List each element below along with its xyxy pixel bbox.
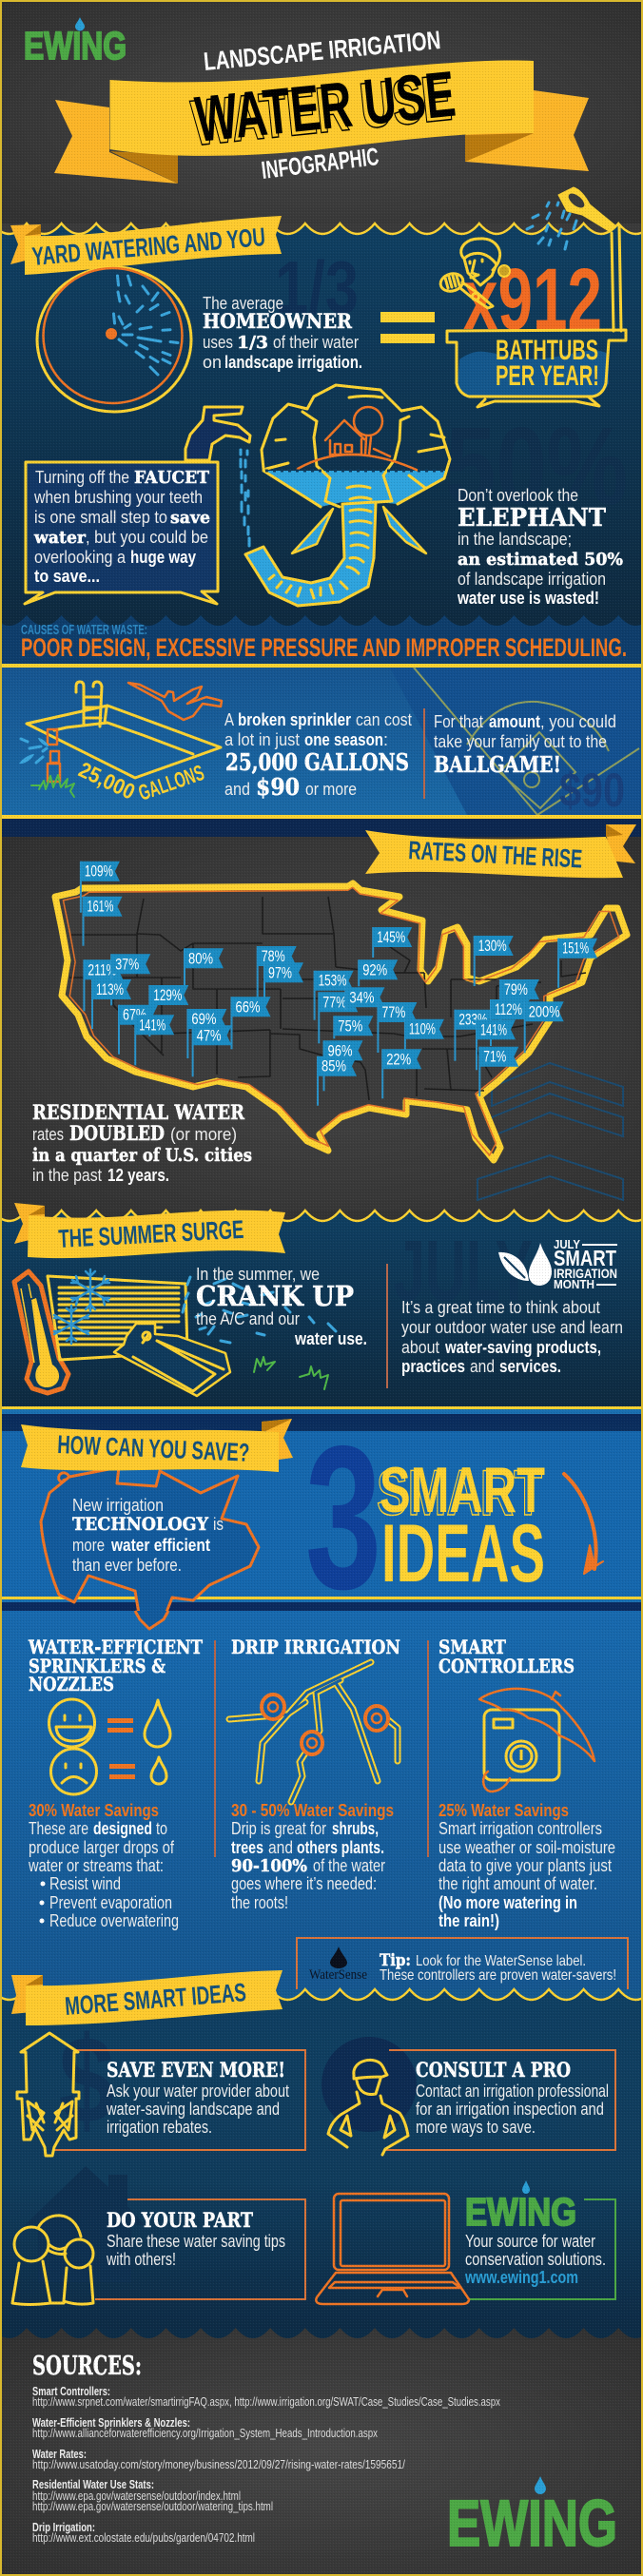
column: drip irrigation: 90-100% bbox=[231, 1856, 307, 1876]
column: drip irrigation: goes where it’s needed: bbox=[231, 1874, 377, 1893]
ghost dollar sign: $ bbox=[59, 2010, 114, 2149]
map flags: rate increases: 151% bbox=[562, 939, 589, 958]
text: residential water rates: 12 years. bbox=[107, 1166, 169, 1185]
column: sprinklers and nozzles: water or streams that: bbox=[28, 1856, 164, 1875]
text: residential water rates bbox=[32, 1100, 252, 1185]
map flags: rate increases: 34% bbox=[349, 988, 374, 1006]
map flags: rate increases: 37% bbox=[115, 955, 139, 973]
column: smart controllers: Smart irrigation controllers bbox=[438, 1819, 602, 1838]
text: great time to think: about bbox=[401, 1338, 439, 1357]
callout: faucet speech box: save bbox=[170, 508, 210, 528]
map flags: rate increases: 110% bbox=[409, 1020, 436, 1038]
text: crank up the a/c: the A/C and our bbox=[196, 1309, 300, 1328]
heading: smart ideas: SMART bbox=[377, 1457, 542, 1529]
source list: Smart Controllers: bbox=[32, 2385, 110, 2398]
text: great time to think: It’s a great time to think about bbox=[401, 1298, 600, 1317]
source list bbox=[32, 2385, 501, 2545]
ghost number 1/3: 1/3 bbox=[275, 245, 359, 329]
map flags: rate increases: 109% bbox=[85, 862, 113, 881]
column: drip irrigation bbox=[229, 1636, 400, 1912]
column: drip irrigation: Drip is great for bbox=[231, 1819, 326, 1838]
text: great time to think: and bbox=[470, 1357, 495, 1376]
text: average homeowner: of their water bbox=[273, 333, 359, 352]
title: water use: WATER USE bbox=[192, 58, 458, 156]
column: sprinklers and nozzles: to bbox=[156, 1819, 167, 1838]
text: overlook the elephant: Don’t overlook the bbox=[458, 486, 578, 505]
text: broken sprinkler cost: $90 bbox=[256, 773, 300, 801]
text: overlook the elephant: of landscape irrigation bbox=[458, 570, 606, 589]
icon: elephant with house bbox=[245, 385, 450, 606]
text: bathtubs per year bbox=[496, 335, 599, 392]
text: broken sprinkler cost: A bbox=[224, 710, 234, 729]
text: broken sprinkler cost: and bbox=[224, 780, 250, 799]
text: new irrigation technology: TECHNOLOGY bbox=[72, 1514, 208, 1535]
map flags: rate increases: 77% bbox=[322, 993, 346, 1011]
callout: faucet speech box: water bbox=[33, 528, 86, 548]
text: crank up the a/c: water use. bbox=[294, 1329, 367, 1348]
icon: controller under umbrella bbox=[479, 1689, 594, 1792]
column: sprinklers and nozzles: Reduce overwatering bbox=[49, 1911, 179, 1930]
column: sprinklers and nozzles bbox=[28, 1636, 203, 1930]
map flags: rate increases: 77% bbox=[381, 1003, 405, 1021]
column: drip irrigation: others plants. bbox=[297, 1838, 384, 1857]
divider bbox=[427, 1640, 429, 1857]
column: smart controllers: (No more watering in bbox=[438, 1893, 577, 1912]
source list: http://www.epa.gov/watersense/outdoor/watering_tips.html bbox=[32, 2500, 273, 2513]
map flags: rate increases: 96% bbox=[327, 1041, 352, 1059]
text: new irrigation technology: more bbox=[72, 1536, 105, 1555]
card: consult a pro: for an irrigation inspection and bbox=[416, 2100, 604, 2119]
text: average homeowner: 1/3 bbox=[237, 333, 268, 353]
column: smart controllers: the right amount of water. bbox=[438, 1874, 597, 1893]
ghost amount $90: $90 bbox=[559, 764, 625, 817]
text: new irrigation technology: is bbox=[213, 1515, 224, 1534]
card: consult a pro: CONSULT A PRO bbox=[416, 2058, 571, 2082]
icon: thermometer bbox=[14, 1271, 68, 1393]
heading: smart ideas bbox=[377, 1454, 545, 1599]
icon: baseball diamond bbox=[414, 668, 639, 815]
callout: watersense tip: WaterSense bbox=[309, 1967, 367, 1983]
card: save even more: irrigation rebates. bbox=[107, 2118, 212, 2137]
icon: broken sprinkler bbox=[19, 729, 74, 797]
logo: July smart irrigation month: SMART bbox=[554, 1246, 616, 1270]
text: residential water rates: in the past bbox=[32, 1166, 102, 1185]
icon: piggy bank bbox=[41, 1467, 259, 1629]
column: smart controllers: the rain!) bbox=[438, 1911, 499, 1930]
label: causes: CAUSES OF WATER WASTE: bbox=[21, 622, 147, 638]
source list: http://www.srpnet.com/water/smartirrigFAQ.aspx, http://www.irrigation.org/SWAT/Case_Studies/Case_Studies.aspx bbox=[32, 2395, 501, 2409]
text: residential water rates: in a quarter of U.S. cities bbox=[32, 1145, 252, 1166]
ghost circle bbox=[322, 2037, 417, 2132]
column: drip irrigation: DRIP IRRIGATION bbox=[231, 1636, 400, 1658]
panel: rates on the rise bbox=[0, 819, 643, 1217]
map flags: rate increases: 113% bbox=[96, 980, 124, 998]
map flags: rate increases: 92% bbox=[362, 960, 387, 978]
text: great time to think: practices bbox=[401, 1357, 465, 1376]
column: drip irrigation: and bbox=[268, 1838, 293, 1857]
column: drip irrigation: trees bbox=[231, 1838, 263, 1857]
icon: lawn sprinkler bbox=[114, 1324, 230, 1396]
panel: yard watering and you bbox=[0, 187, 643, 621]
source list: http://www.ext.colostate.edu/pubs/garden/04702.html bbox=[32, 2531, 255, 2545]
source list: Water Rates: bbox=[32, 2448, 87, 2461]
title ribbon bbox=[54, 60, 589, 184]
ribbon: yard watering and you: YARD WATERING AND YOU bbox=[30, 223, 266, 271]
column: drip irrigation: of the water bbox=[313, 1856, 385, 1875]
callout: faucet speech box: huge way bbox=[130, 548, 196, 567]
panel: the summer surge bbox=[0, 1203, 643, 1407]
map flags: rate increases: 161% bbox=[88, 898, 114, 916]
text: crank up the a/c bbox=[196, 1265, 367, 1348]
card: consult a pro: more ways to save. bbox=[416, 2118, 536, 2137]
text: residential water rates: DOUBLED bbox=[69, 1121, 165, 1145]
card: do your part: with others! bbox=[106, 2250, 176, 2269]
text: crank up the a/c: In the summer, we bbox=[196, 1265, 320, 1284]
map flags: rate increases: 145% bbox=[377, 928, 405, 946]
icon: water tower bbox=[17, 2033, 79, 2156]
card: do your part bbox=[12, 2199, 305, 2305]
text: ballgame: BALLGAME! bbox=[434, 752, 561, 778]
text: average homeowner: The average bbox=[203, 294, 283, 313]
text: residential water rates: rates bbox=[32, 1125, 64, 1144]
logo: Ewing top: EWING bbox=[24, 24, 127, 68]
map flags: rate increases: 78% bbox=[262, 947, 285, 965]
source list: Drip Irrigation: bbox=[32, 2521, 95, 2534]
panel: sources bbox=[0, 2328, 643, 2576]
arrow bbox=[564, 1474, 603, 1574]
ribbon: more smart ideas bbox=[11, 1970, 283, 2025]
source list: http://www.epa.gov/watersense/outdoor/index.html bbox=[32, 2489, 241, 2503]
icon: faces equal drops bbox=[49, 1699, 170, 1794]
title line: infographic: INFOGRAPHIC bbox=[260, 142, 380, 184]
map flags: rate increases: 211% bbox=[88, 960, 116, 978]
text: great time to think bbox=[401, 1298, 623, 1376]
divider bbox=[214, 1640, 216, 1857]
card: Ewing contact: Your source for water bbox=[465, 2232, 595, 2251]
map flags: rate increases: 233% bbox=[458, 1011, 487, 1029]
logo: July smart irrigation month: IRRIGATION bbox=[554, 1266, 617, 1281]
text: ballgame: For that bbox=[434, 712, 483, 731]
text: broken sprinkler cost bbox=[224, 710, 412, 801]
text: average homeowner: HOMEOWNER bbox=[203, 309, 352, 333]
title line: landscape irrigation: LANDSCAPE IRRIGATION bbox=[203, 26, 441, 76]
card: save even more bbox=[17, 2033, 305, 2156]
text: great time to think: water-saving products, bbox=[444, 1338, 601, 1357]
map flags: rate increases bbox=[81, 862, 597, 1106]
icon: laptop bbox=[316, 2194, 469, 2304]
map flags: rate increases: 112% bbox=[495, 1000, 522, 1018]
icon: family bbox=[12, 2216, 93, 2305]
curved label: 25,000 gallons: GALLONS bbox=[135, 760, 207, 805]
callout: faucet speech box: overlooking a bbox=[34, 548, 127, 567]
icon: air conditioner bbox=[48, 1276, 187, 1360]
text: overlook the elephant: ELEPHANT bbox=[458, 504, 607, 533]
map flags: rate increases: 200% bbox=[529, 1002, 560, 1020]
text: overlook the elephant: an estimated 50% bbox=[458, 550, 623, 570]
ghost house bbox=[25, 2166, 145, 2282]
text: residential water rates: (or more) bbox=[170, 1125, 237, 1144]
map flags: rate increases: 79% bbox=[504, 980, 528, 998]
heading: sources: SOURCES: bbox=[32, 2352, 142, 2381]
column: drip irrigation: shrubs, bbox=[332, 1819, 379, 1838]
map flags: rate increases: 66% bbox=[236, 997, 261, 1016]
ribbon: more smart ideas: MORE SMART IDEAS bbox=[64, 1978, 247, 2021]
source list: Residential Water Use Stats: bbox=[32, 2478, 154, 2491]
logo: Ewing small: EWING bbox=[465, 2190, 576, 2234]
icon: sprinkler circle bbox=[37, 267, 191, 412]
wave divider bbox=[0, 223, 643, 234]
ribbon: how can you save bbox=[21, 1419, 293, 1472]
column: sprinklers and nozzles: 30% Water Savings bbox=[29, 1801, 159, 1820]
map flags: rate increases: 22% bbox=[386, 1050, 411, 1068]
text: new irrigation technology bbox=[72, 1496, 224, 1575]
logo: July smart irrigation month bbox=[498, 1237, 617, 1291]
card: do your part: DO YOUR PART bbox=[107, 2208, 253, 2232]
icon: faucet bbox=[185, 407, 250, 546]
text: average homeowner: on bbox=[203, 353, 222, 372]
icon: irrigation professional bbox=[328, 2060, 408, 2155]
pig legs over panel bbox=[135, 1611, 168, 1629]
callout: faucet speech box bbox=[25, 462, 218, 604]
callout: faucet speech box: when brushing your teeth bbox=[33, 488, 203, 507]
source list: http://www.usatoday.com/story/money/business/2012/09/27/rising-water-rates/1595651/ bbox=[32, 2458, 405, 2471]
text: average homeowner: uses bbox=[203, 333, 233, 352]
panel: broken sprinkler bbox=[0, 664, 643, 819]
column: sprinklers and nozzles: WATER-EFFICIENT bbox=[28, 1636, 203, 1658]
text: average homeowner: landscape irrigation. bbox=[224, 353, 362, 372]
text: broken sprinkler cost: : bbox=[383, 730, 388, 749]
icon: roots with drip rings bbox=[229, 1662, 398, 1802]
panel: more smart ideas bbox=[0, 1970, 643, 2337]
icon: water spray and grass bbox=[183, 1277, 336, 1389]
text: average homeowner bbox=[203, 294, 362, 372]
column: sprinklers and nozzles: Resist wind bbox=[49, 1874, 121, 1893]
map flags: rate increases: 85% bbox=[322, 1057, 346, 1075]
card: Ewing contact bbox=[316, 2180, 615, 2304]
map flags: rate increases: 97% bbox=[268, 963, 292, 981]
icon: snowflakes bbox=[54, 1269, 109, 1344]
text: crank up the a/c: CRANK UP bbox=[196, 1280, 354, 1312]
column: drip irrigation: 30 - 50% Water Savings bbox=[231, 1801, 394, 1820]
equals sign bbox=[380, 312, 435, 343]
column: drip irrigation: the roots! bbox=[231, 1893, 288, 1912]
panel: header bbox=[0, 0, 643, 238]
column: sprinklers and nozzles: designed bbox=[93, 1819, 152, 1838]
callout: faucet speech box: Turning off the bbox=[35, 468, 129, 487]
callout: faucet speech box: FAUCET bbox=[134, 468, 210, 488]
text: ballgame: amount bbox=[489, 712, 540, 731]
text: ballgame: take your family out to the bbox=[434, 732, 607, 751]
card: save even more: Ask your water provider about bbox=[107, 2082, 289, 2101]
card: Ewing contact: conservation solutions. bbox=[465, 2250, 606, 2269]
curved label: 25,000 gallons bbox=[75, 757, 207, 805]
callout: faucet speech box: is one small step to bbox=[34, 508, 167, 527]
map: United States rate map bbox=[55, 883, 627, 1160]
map flags: rate increases: 141% bbox=[480, 1020, 507, 1038]
text: residential water rates: RESIDENTIAL WATER bbox=[32, 1100, 244, 1124]
card: save even more: SAVE EVEN MORE! bbox=[107, 2058, 285, 2082]
callout: watersense tip: Tip: bbox=[380, 1951, 411, 1970]
map flags: rate increases: 75% bbox=[338, 1017, 362, 1035]
panel: three smart ideas bbox=[0, 1611, 643, 1999]
text: broken sprinkler cost: 25,000 GALLONS bbox=[225, 748, 409, 776]
text: overlook the elephant bbox=[457, 486, 623, 608]
heading: smart ideas: SMART bbox=[380, 1454, 545, 1526]
column: smart controllers: 25% Water Savings bbox=[438, 1801, 569, 1820]
logo: July smart irrigation month: MONTH bbox=[554, 1277, 594, 1291]
callout: faucet speech box: , but you could be bbox=[86, 528, 208, 547]
panel: how can you save bbox=[0, 1403, 643, 1632]
heading: smart ideas: IDEAS bbox=[381, 1508, 545, 1599]
curved label: 25,000 gallons: 25,000 bbox=[75, 757, 139, 804]
text: new irrigation technology: water efficient bbox=[110, 1536, 210, 1555]
divider bbox=[386, 1264, 388, 1388]
ribbon: rates on the rise bbox=[365, 824, 636, 878]
card: consult a pro bbox=[328, 2050, 615, 2155]
map flags: rate increases: 141% bbox=[139, 1016, 166, 1034]
map flags: rate increases: 47% bbox=[197, 1026, 222, 1044]
callout: watersense tip: Look for the WaterSense label. bbox=[416, 1953, 586, 1969]
column: smart controllers: SMART bbox=[438, 1636, 506, 1658]
card: save even more: water-saving landscape and bbox=[106, 2100, 280, 2119]
map flags: rate increases: 153% bbox=[319, 972, 347, 990]
callout: faucet speech box: to save... bbox=[34, 567, 100, 586]
icon: swimming pool bbox=[27, 682, 222, 778]
column: smart controllers: CONTROLLERS bbox=[438, 1655, 575, 1677]
map flags: rate increases: 129% bbox=[153, 986, 182, 1004]
icon: man in bath bbox=[438, 239, 510, 308]
text: overlook the elephant: water use is wasted! bbox=[457, 589, 599, 608]
ghost chevrons bbox=[477, 1063, 623, 1200]
column: sprinklers and nozzles: produce larger drops of bbox=[29, 1838, 175, 1857]
map flags: rate increases: 67% bbox=[123, 1006, 146, 1024]
column: sprinklers and nozzles: SPRINKLERS & bbox=[29, 1655, 166, 1677]
text: new irrigation technology: than ever before. bbox=[72, 1556, 182, 1575]
title: water use bbox=[188, 58, 458, 160]
text: broken sprinkler cost: one season bbox=[304, 730, 383, 749]
ribbon: how can you save: HOW CAN YOU SAVE? bbox=[57, 1430, 250, 1467]
source list: Water-Efficient Sprinklers & Nozzles: bbox=[32, 2416, 190, 2430]
column: smart controllers: data to give your plants just bbox=[438, 1856, 612, 1875]
big numeral 3: 3 bbox=[305, 1403, 381, 1632]
panel: causes of water waste bbox=[0, 615, 643, 665]
logo: July smart irrigation month: JULY bbox=[554, 1237, 580, 1251]
column: sprinklers and nozzles: Prevent evaporation bbox=[49, 1893, 172, 1912]
card: Ewing contact: www.ewing1.com bbox=[464, 2268, 578, 2287]
text: broken sprinkler cost: broken sprinkler bbox=[238, 710, 351, 729]
column: sprinklers and nozzles: These are bbox=[29, 1819, 88, 1838]
ghost word July: JULY bbox=[394, 1224, 533, 1319]
ribbon: the summer surge bbox=[14, 1203, 285, 1258]
ribbon: yard watering and you bbox=[10, 216, 282, 275]
source list: http://www.allianceforwaterefficiency.org/Irrigation_System_Heads_Introduction.aspx bbox=[32, 2427, 379, 2440]
column: smart controllers bbox=[438, 1636, 615, 1930]
text: broken sprinkler cost: or more bbox=[305, 780, 357, 799]
title: water use: WATER USE bbox=[188, 62, 455, 160]
logo: Ewing top bbox=[24, 17, 127, 68]
callout: watersense tip bbox=[297, 1938, 628, 1999]
map flags: rate increases: 80% bbox=[188, 949, 213, 967]
text: overlook the elephant: in the landscape; bbox=[458, 530, 572, 549]
text: new irrigation technology: New irrigation bbox=[72, 1496, 164, 1515]
text: broken sprinkler cost: a lot in just bbox=[224, 730, 300, 749]
text: great time to think: services. bbox=[499, 1357, 561, 1376]
text: ballgame: , you could bbox=[540, 712, 616, 731]
map flags: rate increases: 69% bbox=[191, 1010, 216, 1028]
divider bbox=[423, 708, 425, 799]
map flags: rate increases: 130% bbox=[478, 937, 507, 955]
column: sprinklers and nozzles: NOZZLES bbox=[29, 1673, 114, 1695]
text: ballgame bbox=[434, 712, 616, 778]
map flags: rate increases: 71% bbox=[483, 1048, 506, 1066]
ribbon: the summer surge: THE SUMMER SURGE bbox=[58, 1215, 244, 1253]
card: do your part: Share these water saving tips bbox=[107, 2232, 285, 2251]
icon: shower and bathtub bbox=[447, 187, 626, 407]
text: broken sprinkler cost: can cost bbox=[356, 710, 412, 729]
